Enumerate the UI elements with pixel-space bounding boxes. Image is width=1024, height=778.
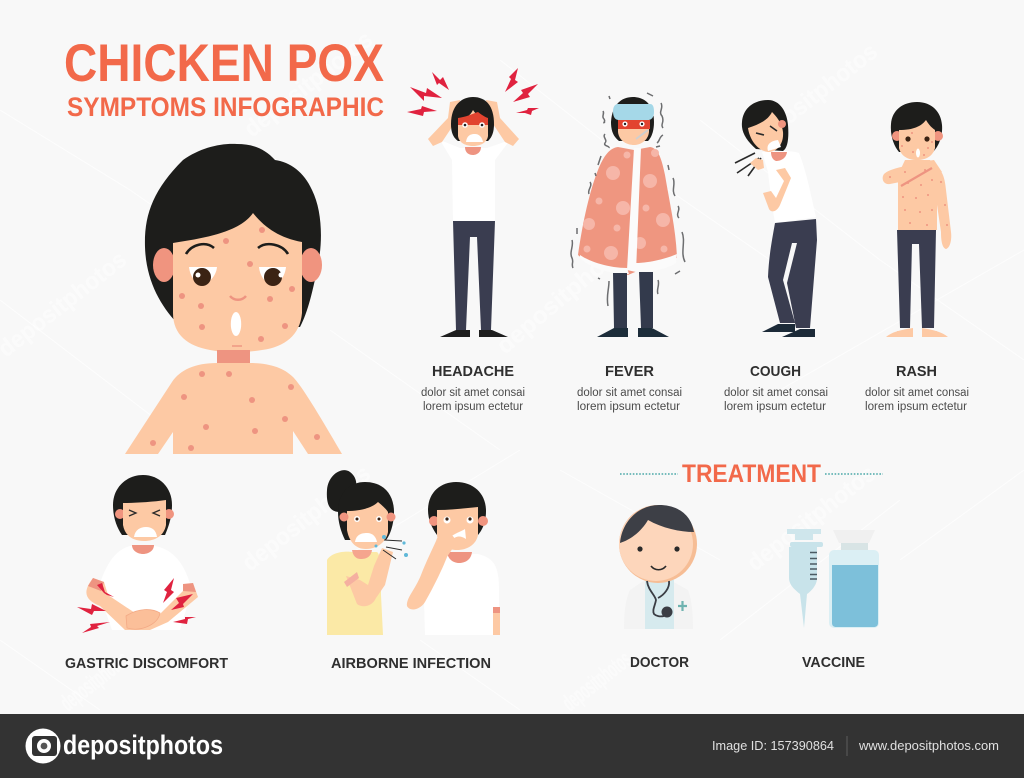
glass [829,550,879,628]
subtitle: SYMPTOMS INFOGRAPHIC [67,92,384,122]
thermometer [636,130,648,139]
face [458,110,488,146]
label: rash [865,363,969,413]
stethoscope [647,581,672,618]
label: rash: lorem ipsum ectetur [865,401,967,413]
label: doctor: DOCTOR [630,654,689,671]
coat cross [678,601,687,611]
labels: symptoms [421,363,969,413]
shirt [440,140,510,222]
trousers [768,219,817,328]
text: depositphotos [55,646,135,717]
label: fever: dolor sit amet consai [577,387,682,399]
needle [800,594,807,628]
logo icon [26,728,60,764]
label: gastric discomfort: GASTRIC DISCOMFORT [65,655,228,672]
shoes [440,330,508,337]
shirt [98,546,192,630]
boy: eyes [444,516,474,524]
nose and mouth [230,296,246,346]
liquid [832,565,878,627]
hair [451,97,494,141]
boy: face [437,507,478,550]
ears [892,131,902,141]
title line: chicken pox: CHICKEN POX [64,34,384,93]
label: headache: dolor sit amet consai [421,387,525,399]
hair [145,144,321,327]
girl: ears, eyes, mouth [340,512,396,542]
site url: www.depositphotos.com [858,738,999,753]
label: cough: COUGH [750,363,801,380]
image id: Image ID: 157390864 [712,738,834,753]
neck [841,543,868,550]
cap [833,530,875,543]
figure: rash [883,102,951,337]
head [619,505,697,583]
text: depositphotos [742,460,881,577]
label: cough: lorem ipsum ectetur [724,401,826,413]
arm and hand on chest [763,168,791,211]
face [123,500,166,541]
neck [217,350,250,364]
trousers [453,221,495,330]
flange [790,542,823,547]
girl: hair bun [327,470,356,512]
girl: hair [338,482,394,540]
figure: airborne infection [327,470,500,635]
figure: headache [407,68,539,337]
hand near mouth [750,158,764,170]
face [619,507,693,581]
face [173,213,302,352]
girl: arm [346,548,393,606]
girl: dress [327,552,383,635]
labels: bottom row [65,654,865,672]
icon: vaccine syringe [787,529,823,628]
eyes and smile [637,546,680,570]
boy: neck [447,552,472,563]
mouth and eyes [756,126,781,151]
shiver marks [571,93,685,306]
label: cough [724,363,828,413]
ear [778,120,786,128]
logo text: depositphotos [63,730,223,760]
hair [891,102,942,152]
neck [771,152,787,161]
hair [611,97,654,141]
arms [86,578,198,630]
text: depositphotos [239,26,378,143]
trousers [897,230,936,328]
label: fever [577,363,682,413]
boy: mouth [450,529,466,540]
hair [620,505,694,543]
shoulders [125,363,342,454]
red band [458,112,488,125]
shoes [762,324,815,337]
label: headache [421,363,525,413]
neck [132,545,154,554]
hair [742,100,788,151]
ears [115,509,125,519]
label: rash: RASH [896,363,937,380]
arm across chest [883,160,942,184]
eyebrows [186,244,288,254]
neck [465,147,481,155]
cloak [578,147,677,275]
title [64,34,384,122]
red band [618,120,650,129]
pox spots [150,227,320,451]
legs [613,272,653,328]
feet [886,328,948,337]
boy: shirt [424,554,499,635]
arms [428,100,519,146]
label: cough: dolor sit amet consai [724,387,828,399]
ears [153,248,175,282]
face [899,120,935,160]
text: depositphotos [237,460,376,577]
rash spots [889,132,948,333]
pain bolts [77,578,196,633]
icon: vaccine bottle [829,530,879,628]
coat [624,580,693,629]
hanging arm [934,166,951,249]
eyes and mouth [905,136,930,158]
torso [898,160,937,230]
boy: ears [429,516,488,526]
figure: gastric discomfort [77,475,198,633]
heading: treatment: TREATMENT [682,460,821,488]
label: headache: HEADACHE [432,363,514,380]
label: rash: dolor sit amet consai [865,387,969,399]
girl: face [347,502,388,549]
face [618,118,649,145]
ice pack [613,104,654,120]
lightning bolts [407,68,539,116]
figure: fever [571,93,685,337]
boy: hair [428,482,486,535]
face [748,112,783,152]
text: depositphotos [492,230,639,360]
eyes and mouth [462,122,485,142]
eyes [189,267,286,286]
shirt [645,580,674,629]
hair [113,475,172,535]
boy: arm and hand [407,532,456,609]
mouth [134,527,157,537]
label: headache: lorem ipsum ectetur [423,401,523,413]
shoes [597,328,669,337]
plunger [787,529,821,540]
eyes [622,121,645,127]
text: depositphotos [557,646,637,717]
girl: neck [352,550,372,559]
cloak opening and trim [580,148,677,274]
footer bar [0,714,1024,778]
label: vaccine: VACCINE [802,654,865,671]
label: airborne infection: AIRBORNE INFECTION [331,655,491,672]
main portrait with spots [125,144,342,454]
icon: doctor [619,505,697,629]
cloak polka dots [583,149,670,260]
label: fever: FEVER [605,363,654,380]
squinting eyes [129,510,160,516]
cough lines [735,153,761,176]
boy: far arm [493,607,500,635]
cough lines and droplets [374,535,408,559]
text: depositphotos [744,38,883,155]
label: fever: lorem ipsum ectetur [577,401,680,413]
shirt [762,151,816,223]
barrel [789,547,817,594]
scale marks [810,552,817,579]
figure: cough [735,100,817,337]
